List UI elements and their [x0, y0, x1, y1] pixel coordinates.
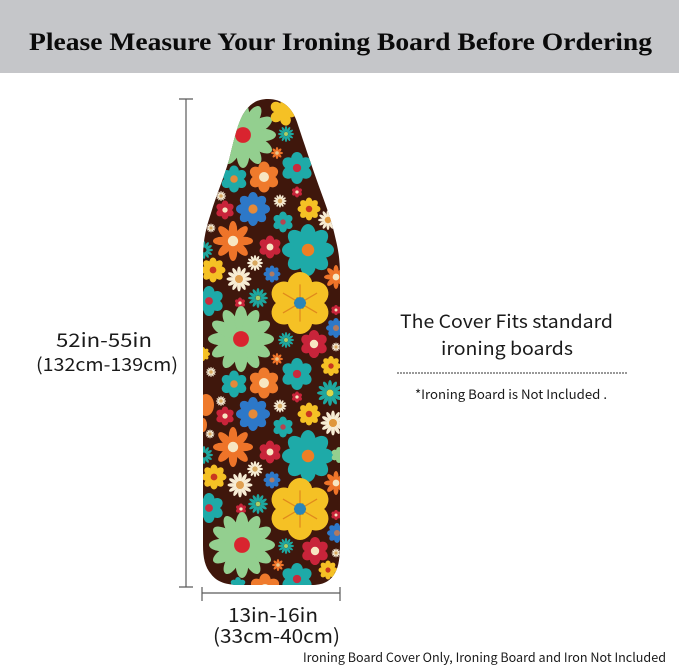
vertical dimension arrow [179, 99, 193, 587]
header band [0, 0, 679, 73]
width label: 13in-16in [228, 599, 318, 628]
footer disclaimer: Ironing Board Cover Only, Ironing Board and Iron Not Included [303, 647, 666, 666]
length label [36, 326, 178, 377]
width label: (33cm-40cm) [213, 620, 340, 649]
title: Please Measure Your Ironing Board Before Ordering [29, 29, 653, 56]
fit note: The Cover Fits standard [400, 308, 613, 334]
fit note [400, 308, 613, 361]
not included note: *Ironing Board is Not Included . [415, 384, 607, 403]
ironing board cover with floral pattern [203, 99, 340, 585]
floral pattern, repeating [203, 102, 340, 585]
horizontal dimension arrow [202, 587, 340, 601]
length label: (132cm-139cm) [36, 351, 178, 377]
width label [213, 599, 340, 649]
fit note: ironing boards [441, 335, 573, 361]
length label: 52in-55in [56, 326, 152, 353]
